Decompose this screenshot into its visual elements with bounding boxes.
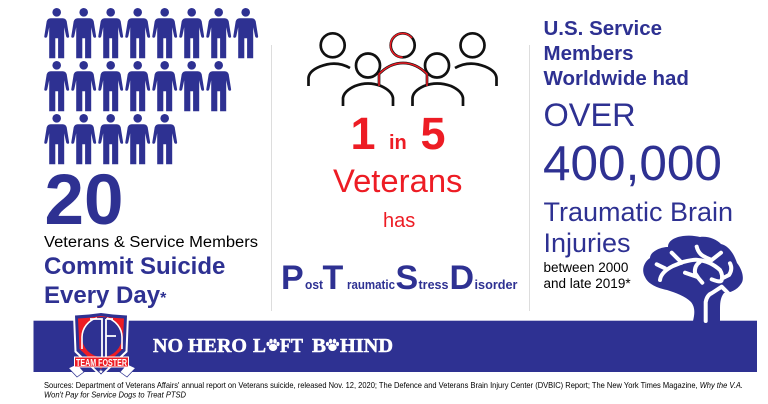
text: veterans and service members: Veterans & Service Members <box>44 234 258 251</box>
text: post traumatic stress disorder: ost <box>305 277 324 292</box>
text: 1 in 5: 1 <box>350 108 376 159</box>
text: us service members: Members <box>544 42 634 65</box>
text: date range: between 2000 <box>544 260 628 275</box>
banner slogan: B <box>312 335 326 357</box>
banner slogan <box>153 335 393 357</box>
text: us service members <box>544 17 689 90</box>
big number 20: 20 <box>44 161 123 240</box>
text: post traumatic stress disorder <box>281 259 518 297</box>
text: us service members: U.S. Service <box>544 17 662 40</box>
divider left <box>271 45 272 311</box>
text: traumatic brain injuries: Injuries <box>544 228 631 258</box>
icon: brain tree <box>643 236 743 321</box>
text: date range <box>544 260 631 291</box>
text: post traumatic stress disorder: D <box>450 259 474 297</box>
text: commit suicide every day <box>44 253 225 309</box>
text: post traumatic stress disorder: P <box>281 259 304 297</box>
banner slogan: FT <box>280 335 304 357</box>
text: over: OVER <box>544 97 636 133</box>
text: veterans: Veterans <box>333 162 462 199</box>
text: traumatic brain injuries <box>544 197 733 258</box>
divider right <box>529 45 530 311</box>
text: post traumatic stress disorder: raumatic <box>347 277 395 292</box>
banner slogan: HIND <box>340 335 393 357</box>
banner <box>34 321 757 372</box>
logo: team foster shield: TEAM FOSTER <box>76 358 128 369</box>
text: date range: and late 2019* <box>544 276 631 291</box>
pictogram: 20 people <box>44 8 258 164</box>
banner slogan: L <box>253 335 266 357</box>
sources: Won't Pay for Service Dogs to Treat PTSD <box>44 390 186 400</box>
text: post traumatic stress disorder: T <box>322 259 344 297</box>
icon: group of five people, one red <box>308 33 496 106</box>
text: commit suicide every day: Every Day* <box>44 282 167 309</box>
text: 400,000: 400,000 <box>543 136 722 191</box>
text: 1 in 5: 5 <box>420 108 446 159</box>
text: commit suicide every day: Commit Suicide <box>44 253 225 280</box>
text: has: has <box>383 210 415 232</box>
text: post traumatic stress disorder: S <box>396 259 418 297</box>
banner slogan: NO HERO <box>153 335 247 357</box>
text: us service members: Worldwide had <box>544 67 689 90</box>
text: post traumatic stress disorder: tress <box>418 277 448 292</box>
text: 1 in 5 <box>350 108 446 159</box>
text: post traumatic stress disorder: isorder <box>474 277 518 292</box>
sources: Sources: Department of Veterans Affairs' annual report on Veterans suicide, released Nov. 12, 2020; The Defence and Veterans Brain Injury Center (DVBIC) Report; The New York Times Magazine, Why the V.A. <box>44 380 743 390</box>
sources <box>44 380 743 400</box>
logo: team foster shield <box>68 311 136 377</box>
text: traumatic brain injuries: Traumatic Brain <box>544 197 733 227</box>
text: 1 in 5: in <box>389 132 407 154</box>
logo: team foster shield: ★ <box>98 368 104 376</box>
